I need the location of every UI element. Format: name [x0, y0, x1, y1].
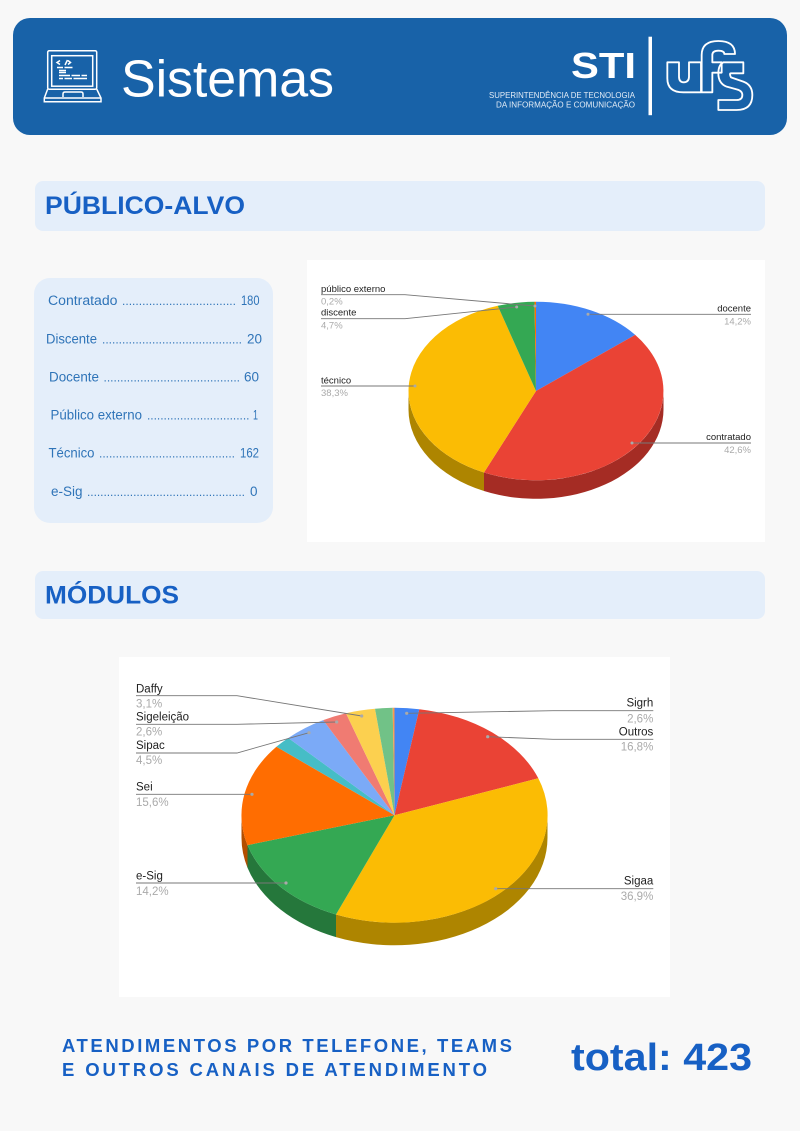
logo: STI: STI: [571, 45, 636, 86]
labels: 16,8%: [621, 742, 653, 754]
footer text: atendimentos: ATENDIMENTOS POR TELEFONE, TEAMS: [62, 1035, 512, 1056]
row: contratado: [48, 293, 260, 308]
row: discente: ..........................................: [102, 332, 242, 346]
labels: 0,2%: [321, 297, 343, 308]
labels: discente: [321, 308, 356, 319]
chart: público-alvo 3D pie: [307, 260, 765, 542]
labels: [136, 683, 654, 903]
pie top slices: [409, 302, 663, 480]
labels: 36,9%: [621, 891, 653, 903]
labels: Sigeleição: [136, 712, 189, 724]
labels: 3,1%: [136, 698, 162, 710]
panel: público-alvo counts list: [34, 278, 273, 523]
row: docente: Docente: [49, 369, 99, 384]
row: técnico: .........................................: [99, 446, 235, 460]
footer text: atendimentos: E OUTROS CANAIS DE ATENDIMENTO: [62, 1059, 487, 1080]
logo: STI: DA INFORMAÇÃO E COMUNICAÇÃO: [496, 99, 635, 109]
row: público externo: Público externo: [50, 408, 142, 422]
row: e-Sig: e-Sig: [51, 484, 82, 499]
leader lines: [321, 295, 751, 444]
labels: Daffy: [136, 683, 163, 695]
title: Sistemas: [121, 50, 334, 108]
section heading: módulos: [35, 571, 765, 619]
row: discente: [46, 331, 262, 346]
row: público externo: ...............................: [147, 408, 250, 422]
footer text: atendimentos: [62, 1035, 512, 1080]
logo: STI: [489, 45, 636, 109]
labels: 4,5%: [136, 755, 162, 767]
labels: 4,7%: [321, 320, 343, 332]
row: contratado: 180: [241, 293, 260, 308]
labels: contratado: [706, 432, 751, 443]
labels: técnico: [321, 375, 351, 386]
row: público externo: [50, 408, 258, 422]
labels: 42,6%: [724, 445, 752, 456]
row: e-Sig: ................................................: [87, 485, 245, 499]
pie side walls: [408, 391, 664, 499]
footer total: total: 423: [571, 1037, 752, 1079]
labels: público externo: [321, 284, 385, 295]
row: técnico: 162: [240, 446, 259, 460]
labels: [321, 284, 752, 456]
labels: 2,6%: [627, 714, 653, 726]
logo: ufs: [667, 41, 752, 110]
labels: Sigaa: [624, 876, 654, 888]
logo: STI: SUPERINTENDÊNCIA DE TECNOLOGIA: [489, 90, 635, 100]
row: docente: .........................................: [104, 370, 240, 384]
section heading: módulos: MÓDULOS: [45, 579, 179, 609]
labels: Sipac: [136, 740, 165, 752]
labels: 14,2%: [136, 886, 169, 898]
labels: 38,3%: [321, 388, 348, 399]
labels: 15,6%: [136, 797, 169, 809]
labels: 14,2%: [724, 316, 752, 327]
chart: módulos 3D pie: [119, 657, 670, 997]
labels: e-Sig: [136, 870, 163, 882]
logo separator: [648, 37, 652, 115]
row: docente: [49, 369, 259, 384]
labels: 2,6%: [136, 727, 162, 739]
row: discente: Discente: [46, 331, 97, 346]
row: contratado: Contratado: [48, 293, 118, 308]
row: técnico: [48, 446, 259, 460]
row: e-Sig: 0: [250, 484, 258, 499]
row: público externo: 1: [253, 408, 258, 422]
pie side walls: [241, 815, 548, 945]
row: contratado: ..................................: [122, 294, 236, 308]
row: técnico: Técnico: [48, 446, 94, 460]
pie top slices: [241, 708, 548, 923]
section heading: público-alvo: [35, 181, 765, 231]
row: discente: 20: [247, 331, 262, 346]
header banner: [13, 18, 787, 135]
leader lines: [136, 696, 653, 890]
icon: laptop with code: [44, 51, 101, 102]
labels: Outros: [619, 726, 654, 738]
labels: Sigrh: [626, 698, 653, 710]
section heading: público-alvo: PÚBLICO-ALVO: [45, 190, 245, 220]
row: docente: 60: [244, 369, 259, 384]
labels: Sei: [136, 782, 153, 794]
labels: docente: [717, 304, 751, 315]
